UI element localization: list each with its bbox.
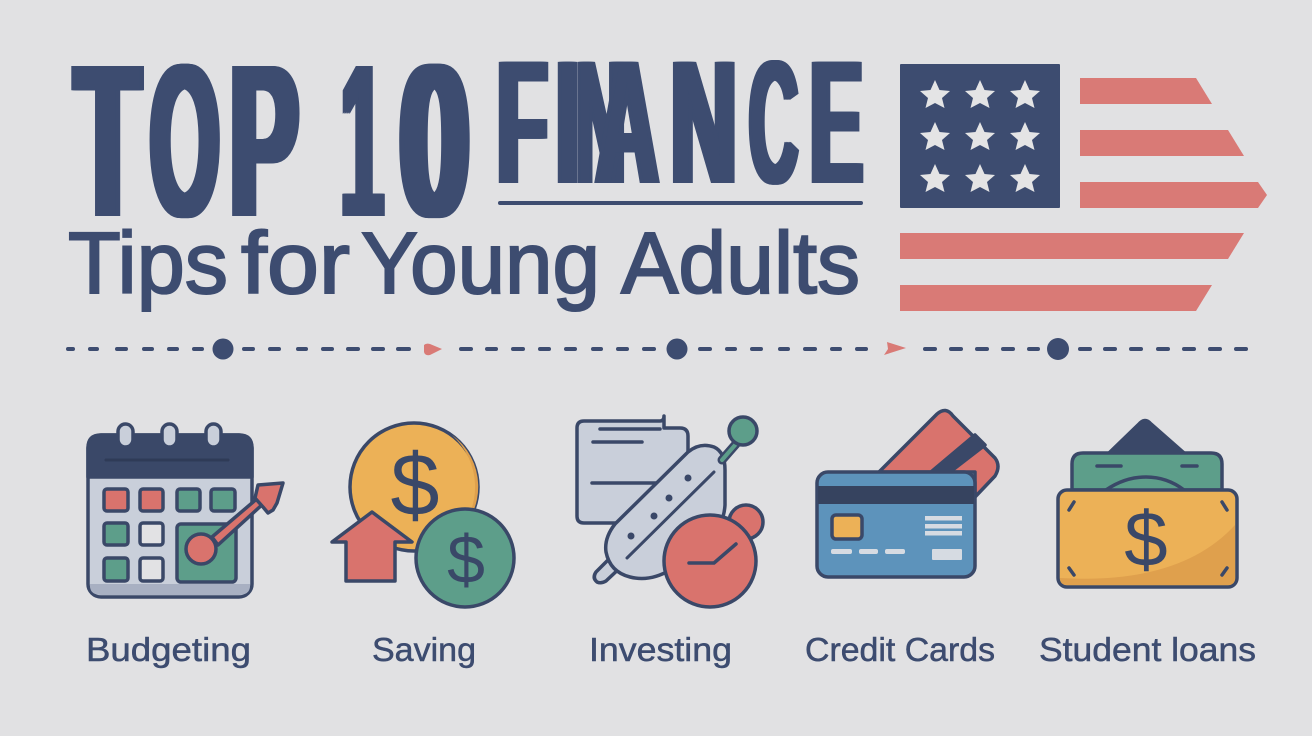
title: FINANCE: F (497, 25, 548, 221)
title: TOP 10: T (75, 20, 140, 262)
title: FINANCE: N (671, 25, 737, 221)
icon: budgeting calendar (88, 424, 283, 597)
label: Student loans: Student loans (1039, 631, 1256, 668)
label: Investing: Investing (589, 631, 732, 668)
icon: student loan wallet (1058, 420, 1237, 587)
label: Budgeting: Budgeting (86, 631, 251, 668)
subtitle: Tips for Young Adults: for (241, 215, 350, 312)
label: Saving: Saving (372, 631, 476, 668)
title: TOP 10: O (150, 20, 220, 262)
dashed timeline divider (66, 338, 1248, 360)
title underline (498, 201, 863, 205)
icon: investing documents, capsule and timer (577, 416, 763, 607)
icon: credit cards (817, 410, 998, 577)
title: FINANCE: I (556, 25, 579, 221)
title: FINANCE (497, 25, 864, 221)
title: TOP 10: 1 (341, 20, 383, 262)
dollar sign on wallet: $ (1124, 495, 1168, 583)
subtitle: Tips for Young Adults (68, 215, 860, 312)
title: TOP 10: 0 (400, 20, 469, 262)
icon: American flag (900, 64, 1267, 311)
icon: saving coins and house arrow (332, 423, 514, 607)
title: TOP 10: P (230, 20, 298, 262)
title: FINANCE: E (810, 25, 863, 221)
dollar sign on green coin: $ (447, 522, 485, 598)
label: Credit Cards: Credit Cards (805, 631, 995, 668)
title: FINANCE: C (749, 25, 798, 221)
title: TOP 10 (71, 20, 470, 262)
subtitle: Tips for Young Adults: Adults (621, 215, 860, 312)
dollar sign on gold coin: $ (391, 435, 439, 534)
title: FINANCE: N (576, 25, 626, 221)
subtitle: Tips for Young Adults: Young (361, 215, 600, 312)
subtitle: Tips for Young Adults: Tips (68, 215, 228, 312)
title: FINANCE: A (596, 25, 658, 221)
